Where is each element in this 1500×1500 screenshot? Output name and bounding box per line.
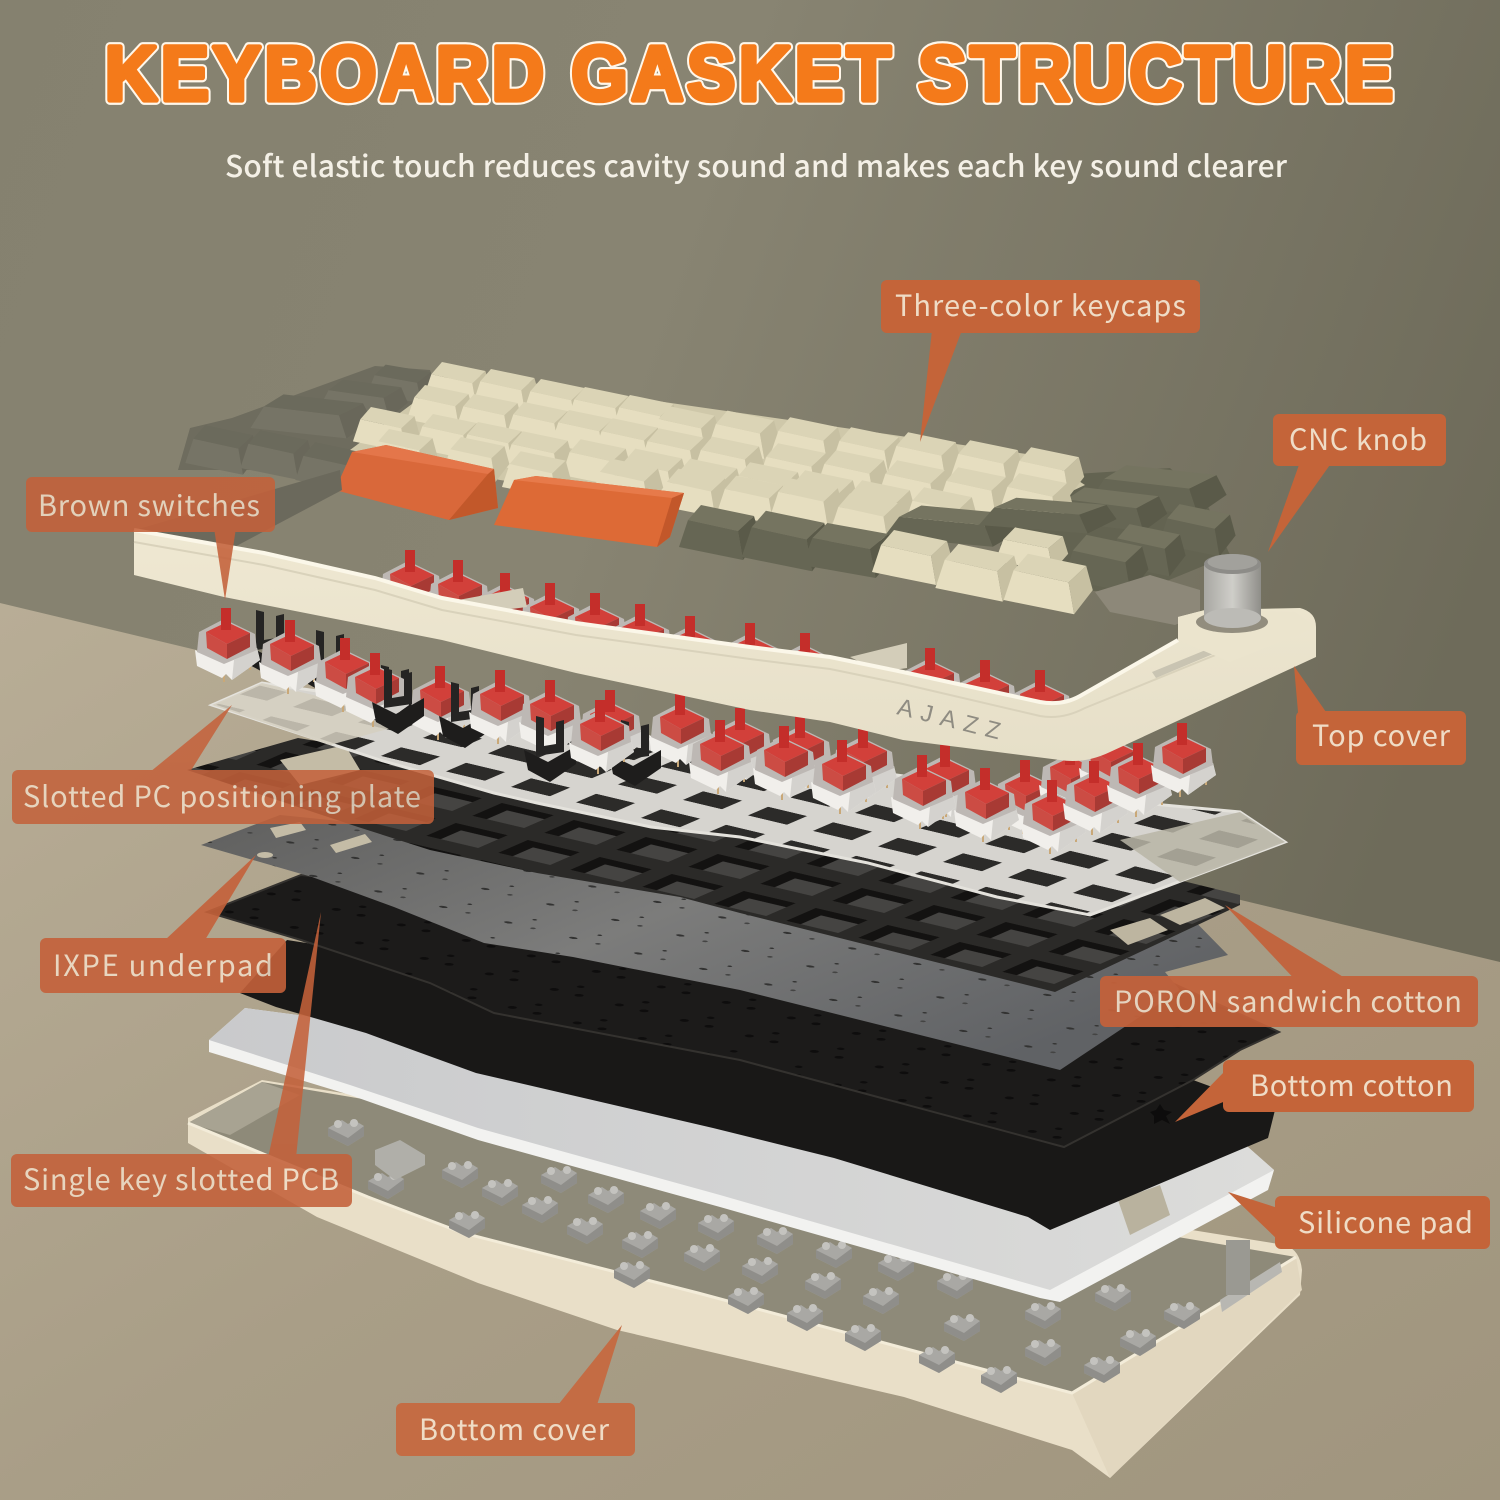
callout: Brown switches xyxy=(26,477,275,600)
callout: Top cover: Top cover xyxy=(1312,713,1451,755)
callout: Three-color keycaps xyxy=(881,280,1200,442)
callout: Bottom cover: Bottom cover xyxy=(419,1407,610,1449)
cream keycaps xyxy=(350,362,1085,543)
callout: PORON sandwich cotton xyxy=(1100,905,1478,1027)
icon: CNC knob xyxy=(1196,554,1268,633)
panel: slotted PC positioning plate xyxy=(212,683,1285,915)
icon: orange keycap 2 xyxy=(494,476,684,547)
panel: silicone pad xyxy=(209,1008,1274,1302)
panel: bottom cotton xyxy=(240,940,1275,1230)
callout: IXPE underpad xyxy=(40,855,286,993)
panel: PORON sandwich cotton xyxy=(187,738,1240,992)
callout: IXPE underpad: IXPE underpad xyxy=(53,943,273,985)
olive keycaps right back xyxy=(1000,465,1236,592)
callout: Slotted PC positioning plate xyxy=(12,705,434,824)
callout: CNC knob xyxy=(1268,414,1446,552)
subtitle: Soft elastic touch reduces cavity sound and makes each key sound clearer xyxy=(225,142,1288,186)
bottom cover studs xyxy=(328,1119,1282,1393)
logo text: AJAZZ xyxy=(895,694,1011,747)
callout: Brown switches: Brown switches xyxy=(38,483,260,525)
olive keycaps left xyxy=(178,365,440,492)
callout: Silicone pad: Silicone pad xyxy=(1298,1200,1473,1242)
callout: Silicone pad xyxy=(1228,1192,1490,1249)
callout: Slotted PC positioning plate: Slotted PC positioning plate xyxy=(23,774,421,816)
callout: Top cover xyxy=(1294,666,1466,765)
cream keycaps front xyxy=(872,527,1093,614)
icon: orange keycap 1 xyxy=(335,445,498,520)
olive keycaps right front xyxy=(679,498,1186,593)
panel: IXPE underpad xyxy=(201,815,1228,1070)
panel: keycaps xyxy=(178,362,1236,614)
panel: top cover frame xyxy=(134,470,1316,761)
background: table surface xyxy=(0,603,1500,1500)
callout: Bottom cover xyxy=(396,1325,635,1456)
callout: Bottom cotton: Bottom cotton xyxy=(1250,1063,1453,1105)
panel: single key slotted PCB xyxy=(207,875,1279,1147)
panel: bottom cover xyxy=(188,1080,1302,1478)
callout: Bottom cotton xyxy=(1175,1060,1474,1122)
title: KEYBOARD GASKET STRUCTURE xyxy=(105,31,1393,117)
callout: Three-color keycaps: Three-color keycaps xyxy=(895,283,1186,325)
callout: CNC knob: CNC knob xyxy=(1289,417,1427,459)
title: KEYBOARD GASKET STRUCTURE xyxy=(105,31,1393,117)
callout: Single key slotted PCB: Single key slotted PCB xyxy=(23,1157,339,1199)
callout: PORON sandwich cotton: PORON sandwich cotton xyxy=(1114,979,1462,1021)
panel: front switches xyxy=(195,608,1216,854)
callout: Single key slotted PCB xyxy=(11,912,352,1207)
panel: back row switches xyxy=(379,550,1074,744)
